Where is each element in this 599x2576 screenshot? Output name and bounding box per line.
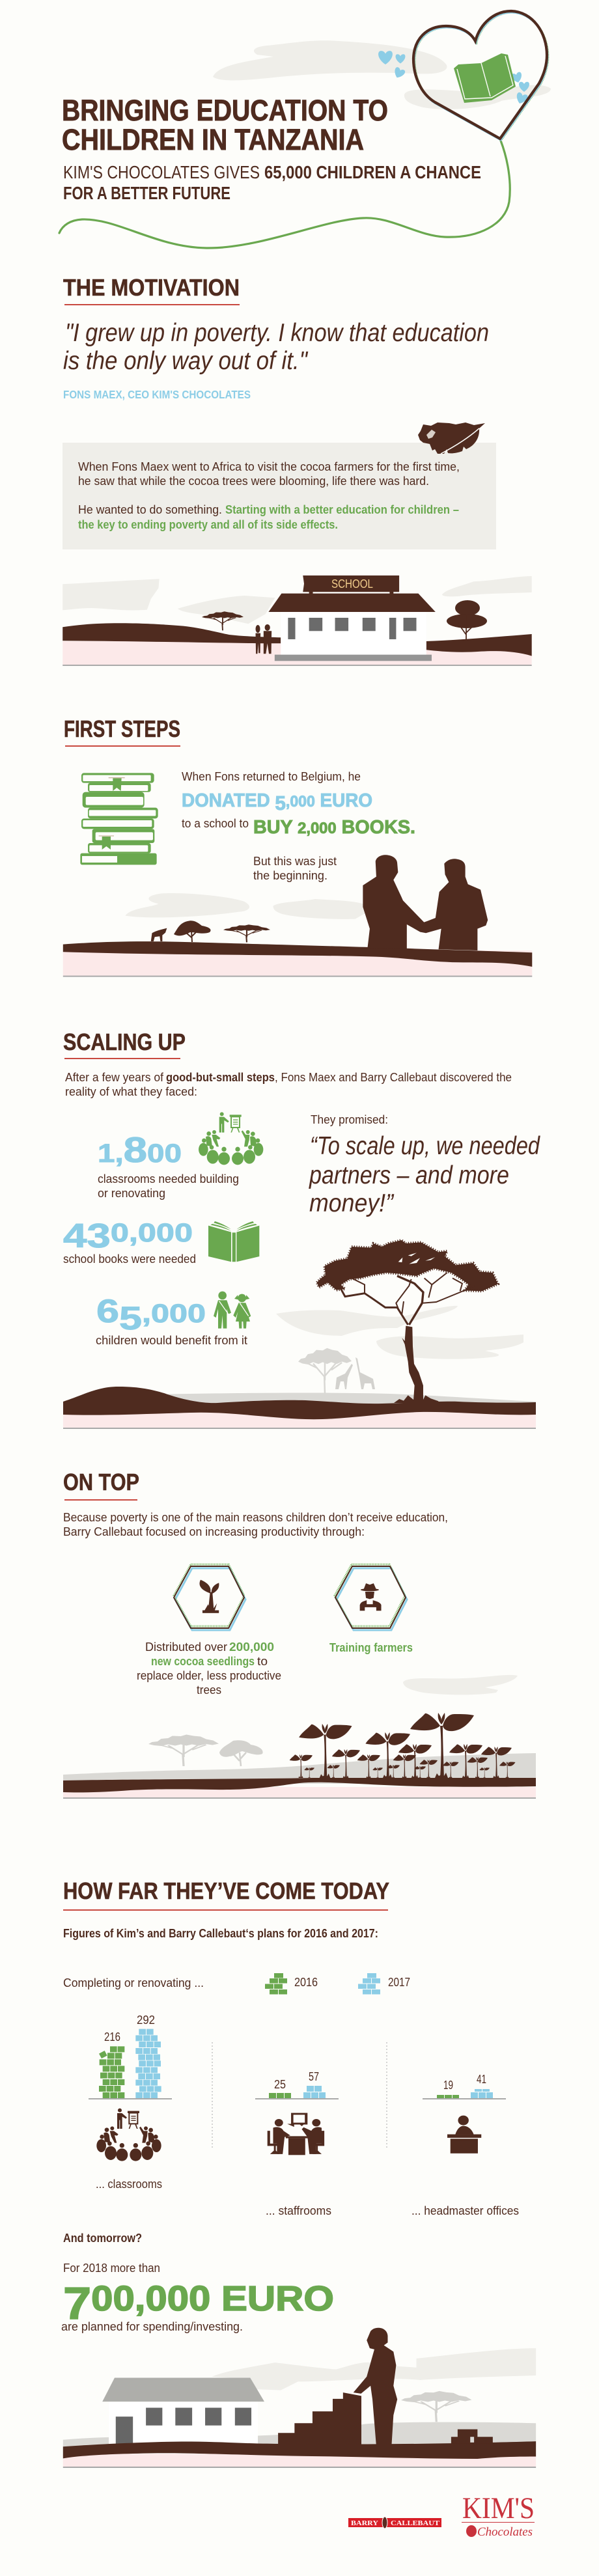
blue brick stack [135, 2029, 161, 2098]
on top intro text: Barry Callebaut focused on increasing productivity through: [63, 1525, 365, 1538]
heart outline [413, 11, 548, 140]
chart: classrooms: 292 [137, 2013, 155, 2027]
stat: 65,000 children: ,000 [142, 1299, 206, 1328]
they promised quote: money!” [309, 1189, 395, 1217]
scene: handshake landscape [63, 855, 532, 977]
icon: tree right of school [447, 600, 487, 640]
icon: small blue hearts [378, 51, 529, 105]
gray hill [153, 1392, 536, 1406]
scaling up intro text: After a few years of [65, 1070, 164, 1084]
chart: staffrooms: 57 [309, 2070, 319, 2083]
chart: classrooms: ... classrooms [96, 2177, 162, 2191]
heading: first steps: FIRST STEPS [64, 715, 180, 742]
and tomorrow text: For 2018 more than [63, 2261, 160, 2275]
quote [63, 319, 489, 375]
and tomorrow text: And tomorrow? [63, 2231, 142, 2245]
training farmers label: Training farmers [329, 1641, 413, 1654]
logo: barry callebaut: CALLEBAUT [391, 2519, 440, 2527]
heading: on top: ON TOP [63, 1469, 139, 1495]
header illustration: clouds, heart, book and string [59, 11, 551, 248]
icon: seedling hexagon [174, 1564, 245, 1630]
chart dividers [212, 2042, 387, 2150]
chart: staffrooms: 25 [274, 2077, 286, 2091]
legend 2017: 2017 [388, 1975, 410, 1989]
first steps text: DONATED [182, 790, 273, 811]
first steps text [182, 769, 415, 882]
first steps text: 5 [275, 792, 286, 814]
chart: headmaster offices [411, 2072, 519, 2217]
stat: 1,800 classrooms: or renovating [98, 1186, 165, 1200]
logo: barry callebaut: BARRY [351, 2519, 378, 2527]
panel: story text: Starting with a better education for children – [225, 503, 459, 516]
chart lead text: Completing or renovating ... [63, 1976, 204, 1989]
icon: green open book [208, 1221, 259, 1262]
heading: the motivation: THE MOTIVATION [63, 274, 240, 301]
panel: story text: When Fons Maex went to Africa to visit the cocoa farmers for the first time, [78, 460, 460, 473]
seedlings text: 200,000 [229, 1640, 274, 1654]
heading: scaling up: SCALING UP [63, 1029, 186, 1055]
ground [63, 941, 532, 967]
wildebeest [151, 928, 167, 941]
and tomorrow text: 00,000 EURO [91, 2279, 334, 2318]
school building [63, 2377, 536, 2447]
icon: brown classroom [96, 2109, 161, 2161]
scene: school landscape [63, 575, 532, 666]
first steps text: But this was just [253, 854, 337, 868]
seedling plants [290, 1713, 516, 1778]
they promised quote: “To scale up, we needed [310, 1132, 540, 1160]
right hill [426, 634, 532, 656]
stat: 430,000 books: school books were needed [63, 1252, 196, 1266]
seedlings text [137, 1640, 281, 1697]
heading: how far they've come today: HOW FAR THEY’VE COME TODAY [63, 1877, 389, 1904]
icon: cocoa leaf [418, 422, 485, 454]
and tomorrow text: are planned for spending/investing. [61, 2320, 243, 2333]
scene: seedlings field [63, 1675, 536, 1799]
chart: staffrooms: ... staffrooms [266, 2204, 331, 2217]
title: CHILDREN IN TANZANIA [62, 123, 364, 156]
gray background tree and giraffes [298, 1348, 375, 1394]
first steps text: EURO [320, 790, 375, 811]
first steps text: When Fons returned to Belgium, he [182, 769, 361, 783]
on top intro text: Because poverty is one of the main reasons children don’t receive education, [63, 1510, 448, 1524]
icon: stack of books [80, 773, 158, 865]
title [62, 94, 388, 156]
stat: 65,000 children [96, 1293, 247, 1347]
icon: staff meeting [268, 2113, 324, 2155]
chart subtitle: Figures of Kim’s and Barry Callebaut‘s plans for 2016 and 2017: [63, 1926, 378, 1940]
logo: kim's chocolates: KIM'S [462, 2491, 535, 2525]
seedlings text: to [257, 1654, 268, 1668]
gray tree [401, 2391, 472, 2422]
first steps text: to a school to [182, 816, 249, 830]
two men shaking hands [363, 855, 488, 950]
legend [265, 1973, 410, 1995]
quote attribution: FONS MAEX, CEO KIM'S CHOCOLATES [63, 388, 251, 401]
stat: 65,000 children: 5 [119, 1300, 142, 1336]
stat: 65,000 children: 6 [96, 1293, 119, 1329]
panel: story text: He wanted to do something. [78, 503, 222, 516]
icon: farmer hexagon [335, 1564, 407, 1630]
subtitle: 65,000 CHILDREN A CHANCE [264, 162, 481, 182]
gray ground [63, 1753, 536, 1784]
stairs and man [278, 2392, 361, 2446]
gray trees [148, 1734, 263, 1766]
brown ground [63, 1778, 536, 1792]
subtitle [63, 162, 481, 203]
scaling up intro text: , Fons Maex and Barry Callebaut discovered the [275, 1070, 512, 1084]
legend 2016 [265, 1973, 318, 1995]
chart: headmaster offices: 19 [443, 2078, 453, 2092]
and tomorrow text [61, 2231, 334, 2333]
quote: "I grew up in poverty. I know that education [65, 319, 489, 347]
stat: 430,000 books: 0,000 [111, 1219, 193, 1247]
seedlings text: replace older, less productive [137, 1669, 281, 1682]
green brick stack [99, 2046, 124, 2098]
panel: story text: he saw that while the cocoa trees were blooming, life there was hard. [78, 474, 429, 488]
and tomorrow text: 7 [63, 2278, 91, 2329]
scene: future school and man on stairs [63, 2328, 536, 2468]
big acacia tree [317, 1240, 498, 1403]
first steps text: the beginning. [253, 868, 327, 882]
subtitle: KIM'S CHOCOLATES GIVES [63, 162, 260, 182]
chart: headmaster offices: ... headmaster offices [411, 2204, 519, 2217]
pink ground [63, 1787, 536, 1798]
stat: 65,000 children: children would benefit from it [96, 1333, 247, 1347]
stat: 1,800 classrooms: classrooms needed building [98, 1172, 239, 1185]
scaling up intro text: reality of what they faced: [65, 1085, 197, 1098]
icon: umbrella trees [174, 921, 270, 942]
icon: open green book [454, 53, 516, 103]
left hill [63, 623, 281, 643]
icon: headmaster at desk [447, 2116, 481, 2154]
panel: story text: the key to ending poverty and all of its side effects. [78, 518, 338, 531]
title: BRINGING EDUCATION TO [62, 94, 388, 127]
logo: barry callebaut [348, 2517, 441, 2528]
scene: savanna [63, 1240, 536, 1428]
first steps text: BUY 2,000 BOOKS. [253, 817, 415, 838]
seedlings text: trees [197, 1683, 221, 1697]
logo: kim's chocolates [462, 2491, 535, 2539]
chart: headmaster offices: 41 [477, 2072, 486, 2086]
legend 2016: 2016 [294, 1975, 318, 1989]
logo: kim's chocolates: Chocolates [477, 2525, 533, 2539]
legend 2017 [358, 1973, 410, 1995]
on top intro text [63, 1510, 448, 1538]
icon: green classroom [199, 1112, 263, 1165]
icon: acacia tree near school [202, 611, 244, 630]
scaling up intro text: good-but-small steps [166, 1070, 275, 1084]
stat: 430,000 books [63, 1217, 196, 1266]
ground [63, 2441, 536, 2459]
stat: 1,800 classrooms: 1,800 [98, 1129, 182, 1170]
they promised quote [309, 1113, 540, 1217]
people silhouettes [256, 624, 272, 654]
seedlings text: new cocoa seedlings [151, 1654, 255, 1668]
they promised quote: They promised: [311, 1113, 388, 1126]
chart: classrooms: 216 [104, 2030, 120, 2043]
subtitle: FOR A BETTER FUTURE [63, 183, 230, 203]
icon: two school children [214, 1292, 251, 1329]
stat: 1,800 classrooms [98, 1129, 239, 1200]
small bricks [451, 2430, 493, 2444]
they promised quote: partners – and more [309, 1161, 509, 1189]
chart: staffrooms [255, 2070, 339, 2217]
scaling up intro text [65, 1070, 512, 1098]
quote: is the only way out of it." [63, 347, 309, 375]
stat: 430,000 books: 43 [63, 1217, 111, 1255]
chart: classrooms [89, 2013, 172, 2191]
brown ground [63, 1387, 536, 1419]
ground line [63, 1428, 536, 1429]
seedlings text: Distributed over [145, 1640, 227, 1654]
school sign text: SCHOOL [331, 577, 373, 590]
string [59, 141, 510, 248]
school building [268, 575, 436, 661]
first steps text: ,000 [286, 793, 315, 810]
panel: story text [63, 443, 496, 549]
